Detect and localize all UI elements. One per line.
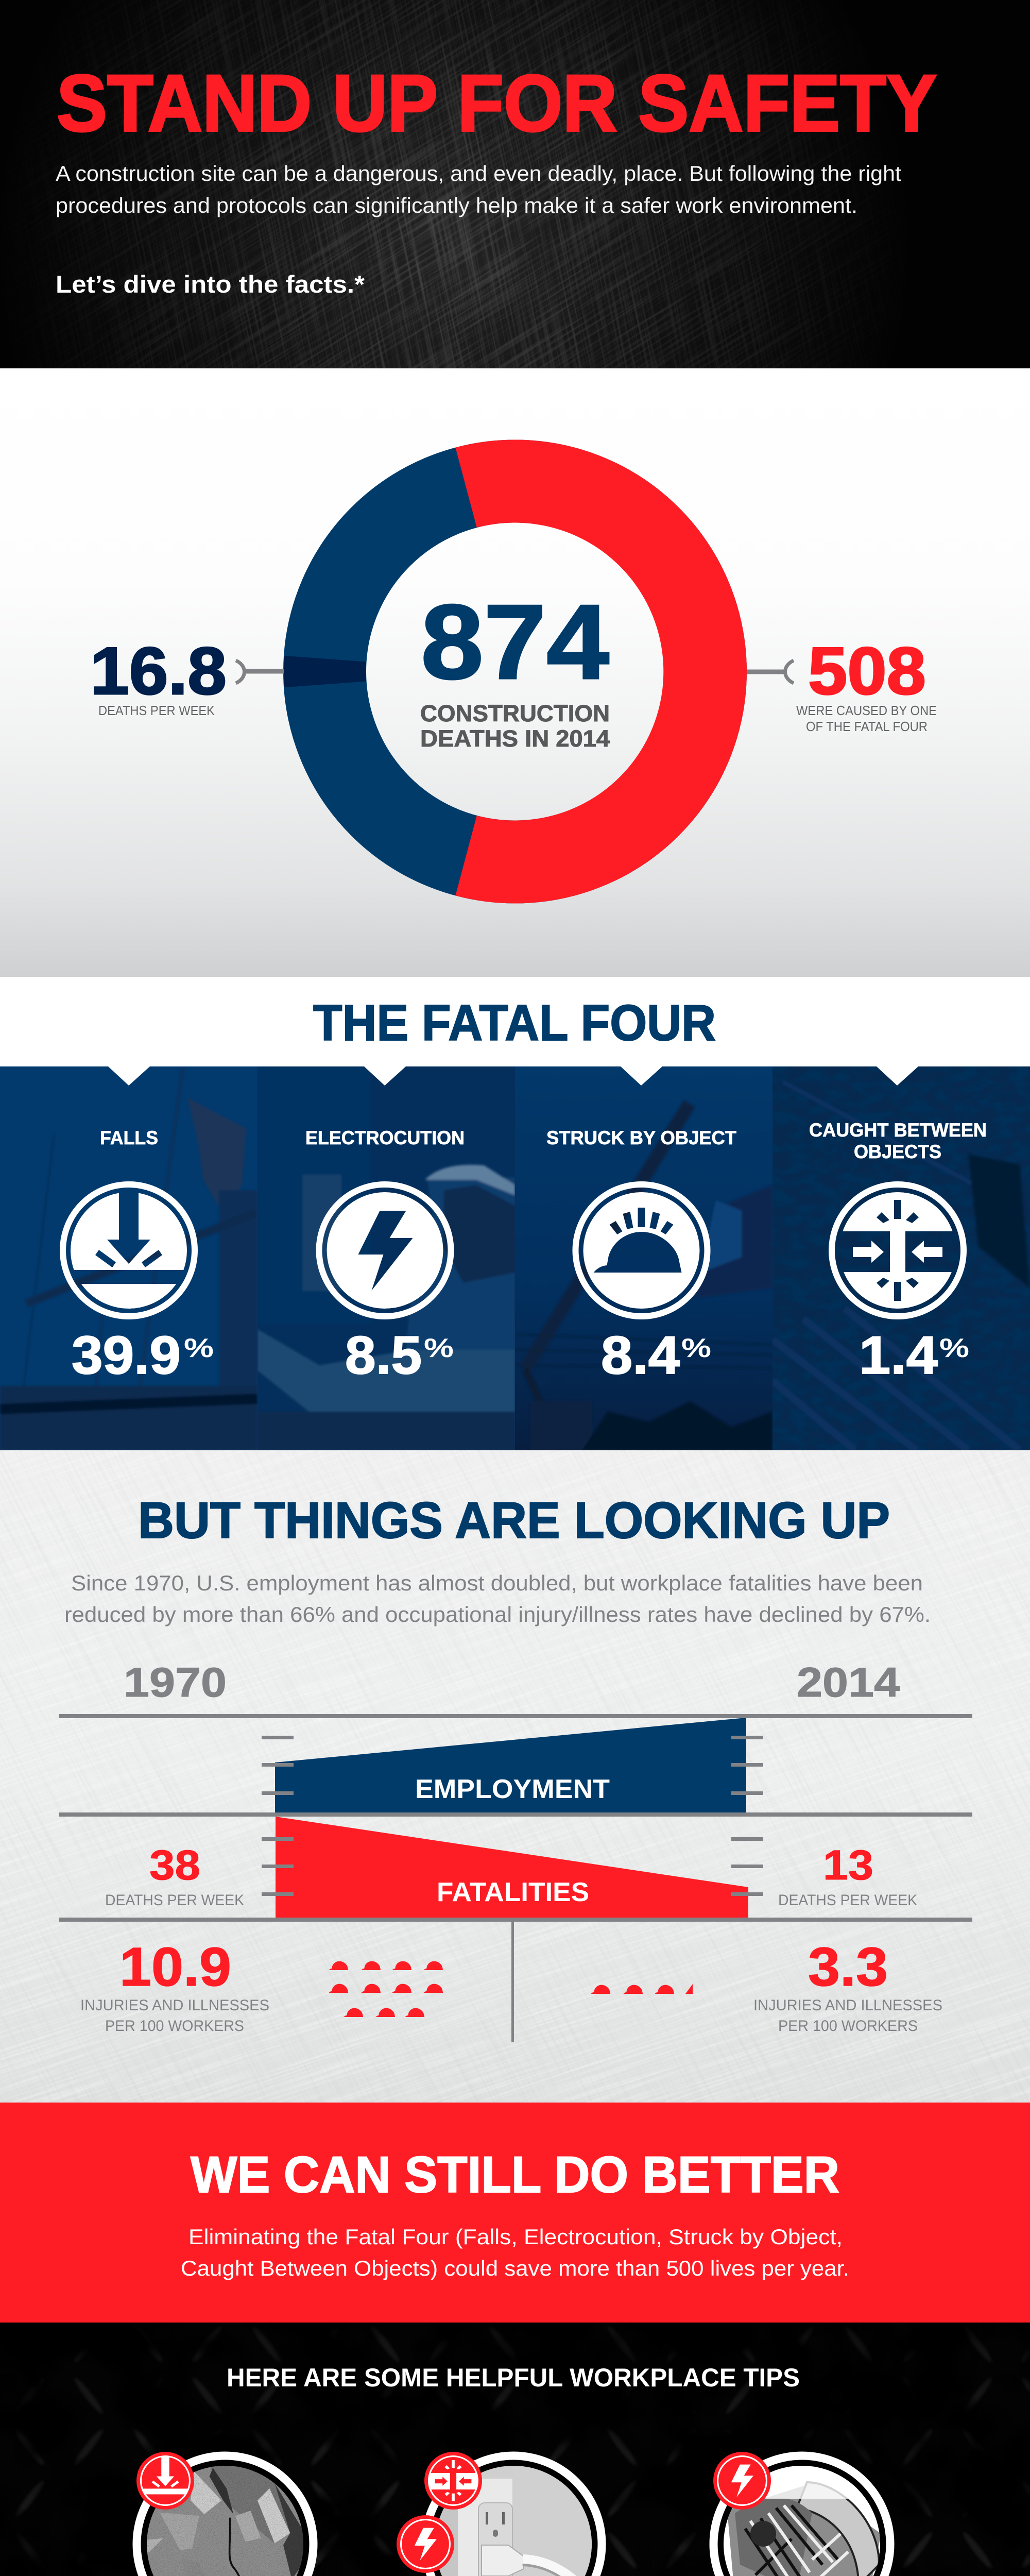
red band xyxy=(0,2103,1030,2323)
number 10.9: 10.9 xyxy=(119,1937,231,1997)
icon: hard hat xyxy=(576,1184,708,1316)
icon: caught between xyxy=(832,1184,964,1316)
notch xyxy=(364,1066,406,1086)
total caption xyxy=(420,700,610,752)
struck by object photo background xyxy=(515,1066,772,1450)
hero background xyxy=(0,0,1030,368)
stat: injuries 1970 xyxy=(80,1937,269,2035)
caption: DEATHS PER WEEK xyxy=(105,1892,244,1909)
hero glow xyxy=(0,0,1030,368)
icon: lightning bolt xyxy=(319,1184,451,1316)
falls photo background xyxy=(0,1066,258,1450)
body text: Eliminating the Fatal Four (Falls, Electrocution, Struck by Object, xyxy=(188,2225,843,2249)
total number: 874 xyxy=(421,583,609,701)
label xyxy=(809,1120,987,1162)
caption: PER 100 WORKERS xyxy=(105,2018,244,2035)
donut section background xyxy=(0,368,1030,977)
pictogram: 2014 hard hats xyxy=(591,1984,693,1994)
number 3.3: 3.3 xyxy=(808,1937,888,1997)
year labels: 2014 xyxy=(797,1659,900,1706)
percentage xyxy=(601,1326,711,1385)
employment label: EMPLOYMENT xyxy=(415,1774,610,1804)
stat caption xyxy=(796,703,937,734)
column: struck by object xyxy=(515,1066,772,1450)
title: STAND UP FOR SAFETY xyxy=(57,59,937,148)
stat 508: 508 xyxy=(808,633,926,708)
percentage: % xyxy=(681,1333,711,1363)
intro text: procedures and protocols can significantly help make it a safer work environment. xyxy=(56,193,857,217)
column: caught between objects xyxy=(772,1066,1030,1450)
icon: falling arrow xyxy=(63,1184,195,1316)
total caption: DEATHS IN 2014 xyxy=(420,725,610,752)
tick marks xyxy=(262,1736,763,1896)
label: OBJECTS xyxy=(854,1141,941,1162)
label: FALLS xyxy=(100,1127,158,1148)
connector left xyxy=(236,660,284,683)
heading: WE CAN STILL DO BETTER xyxy=(191,2146,839,2203)
percentage: 8.5 xyxy=(345,1326,422,1385)
callout: deaths per week xyxy=(90,633,284,718)
caption: PER 100 WORKERS xyxy=(778,2018,918,2035)
badge: electrocution xyxy=(713,2452,771,2510)
caption xyxy=(753,1997,942,2035)
total caption: CONSTRUCTION xyxy=(420,700,610,726)
column: electrocution xyxy=(258,1066,515,1450)
stat caption: OF THE FATAL FOUR xyxy=(806,719,928,734)
photo ring xyxy=(714,2455,890,2576)
stat: deaths per week 2014 xyxy=(778,1842,917,1909)
notch xyxy=(621,1066,662,1086)
badge: electrocution xyxy=(397,2515,454,2573)
axis lines xyxy=(59,1714,972,2042)
callout: fatal four share xyxy=(747,633,937,734)
stat caption: DEATHS PER WEEK xyxy=(98,703,215,718)
stat 16.8: 16.8 xyxy=(90,633,227,708)
donut segment: fatal four xyxy=(455,440,747,903)
body text xyxy=(64,1571,931,1626)
fatalities area xyxy=(276,1817,748,1920)
photo: boots on ground xyxy=(103,2442,360,2576)
metal texture background xyxy=(0,1450,1030,2103)
percentage: % xyxy=(184,1333,214,1363)
pictogram: 1970 hard hats xyxy=(329,1961,443,2017)
percentage: % xyxy=(424,1333,454,1363)
heading: BUT THINGS ARE LOOKING UP xyxy=(138,1492,890,1549)
caption: DEATHS PER WEEK xyxy=(778,1892,917,1909)
intro text xyxy=(56,161,901,217)
notch xyxy=(877,1066,918,1086)
badge: caught between xyxy=(424,2452,482,2510)
label: ELECTROCUTION xyxy=(305,1127,465,1148)
percentage: 8.4 xyxy=(601,1326,680,1385)
photo ring xyxy=(137,2455,313,2576)
body text: Since 1970, U.S. employment has almost doubled, but workplace fatalities have been xyxy=(71,1571,923,1595)
column: falls xyxy=(0,1066,258,1450)
diamond plate background xyxy=(0,2323,1030,2576)
panel: construction deaths donut xyxy=(0,368,1030,977)
donut segment: deaths per week wedge xyxy=(284,656,366,687)
body text: reduced by more than 66% and occupational injury/illness rates have declined by 67%. xyxy=(64,1602,931,1626)
percentage: 1.4 xyxy=(859,1326,938,1385)
heading: HERE ARE SOME HELPFUL WORKPLACE TIPS xyxy=(227,2363,800,2392)
percentage: % xyxy=(939,1333,969,1363)
hero scratch texture xyxy=(79,0,826,368)
employment area xyxy=(275,1718,746,1815)
caption: INJURIES AND ILLNESSES xyxy=(80,1997,269,2014)
heading: the fatal four: THE FATAL FOUR xyxy=(313,994,716,1051)
body text: Caught Between Objects) could save more than 500 lives per year. xyxy=(181,2256,849,2280)
photo ring xyxy=(425,2455,602,2576)
tip: keep good footing xyxy=(103,2442,360,2576)
label: STRUCK BY OBJECT xyxy=(546,1127,736,1148)
connector right xyxy=(747,660,794,683)
caption: INJURIES AND ILLNESSES xyxy=(753,1997,942,2014)
notch xyxy=(108,1066,150,1086)
photo: wall outlet xyxy=(431,2462,596,2576)
panel: things are looking up xyxy=(0,1450,1030,2103)
intro text: A construction site can be a dangerous, and even deadly, place. But following the right xyxy=(56,161,901,185)
panel: we can still do better xyxy=(0,2103,1030,2323)
chart: employment vs fatalities xyxy=(59,1659,972,2042)
fatalities label: FATALITIES xyxy=(437,1877,589,1907)
caught between photo background xyxy=(772,1066,1030,1450)
number 38: 38 xyxy=(149,1842,200,1889)
panel: fatal four xyxy=(0,1066,1030,1450)
donut segment: other deaths xyxy=(324,481,706,862)
year labels: 1970 xyxy=(124,1659,227,1706)
caption xyxy=(80,1997,269,2035)
donut chart xyxy=(284,440,747,903)
panel: workplace tips xyxy=(0,2323,1030,2576)
tip: disconnect tools xyxy=(397,2452,624,2576)
percentage xyxy=(859,1326,969,1385)
stat: deaths per week 1970 xyxy=(105,1842,244,1909)
year labels xyxy=(124,1659,900,1706)
number 13: 13 xyxy=(823,1842,873,1889)
body text xyxy=(181,2225,849,2280)
percentage xyxy=(345,1326,454,1385)
stat caption: WERE CAUSED BY ONE xyxy=(796,703,937,718)
center total xyxy=(420,583,610,752)
label: CAUGHT BETWEEN xyxy=(809,1120,987,1141)
badge: falls xyxy=(136,2452,194,2510)
stat: injuries 2014 xyxy=(753,1937,942,2035)
percentage: 39.9 xyxy=(72,1326,181,1385)
electrocution photo background xyxy=(258,1066,515,1450)
photo: gears xyxy=(719,2462,884,2576)
tip: maintain tools xyxy=(713,2452,890,2576)
lead-in line: Let’s dive into the facts.* xyxy=(56,270,365,298)
panel: hero header xyxy=(0,0,1030,368)
